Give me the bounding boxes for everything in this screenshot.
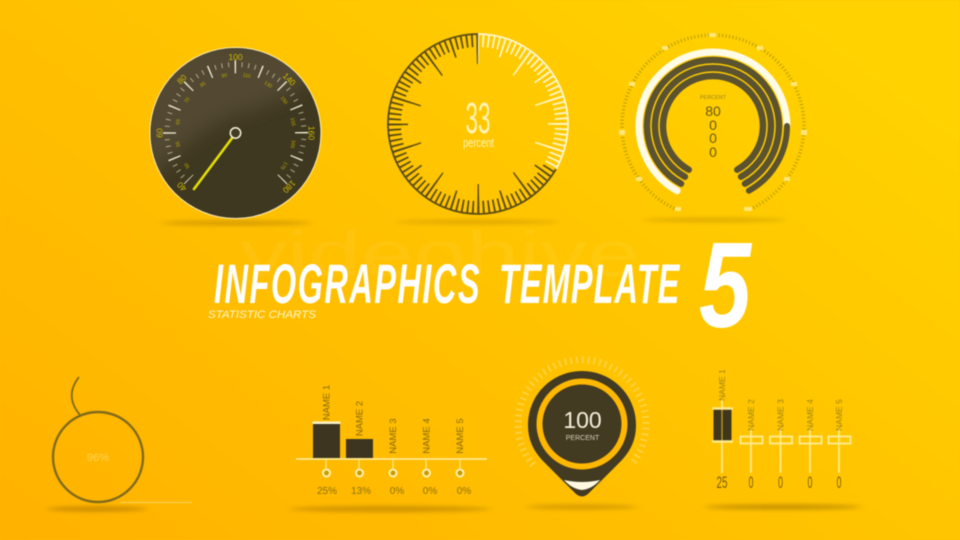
bar values <box>317 486 471 497</box>
panel: percent dial <box>388 34 568 224</box>
pin notch <box>564 480 600 490</box>
outer scale labels: 100 <box>228 52 243 62</box>
inner scale labels: 50 <box>183 161 191 169</box>
dial elapsed ticks <box>477 32 570 170</box>
outer scale labels: 160 <box>306 126 316 140</box>
inner scale labels: 70 <box>183 96 192 105</box>
inner scale labels: 130 <box>263 80 273 90</box>
slider names: NAME 3 <box>776 399 786 431</box>
dotted scale ring <box>622 35 804 210</box>
scale markers <box>619 33 807 211</box>
readout: 0 <box>709 144 717 160</box>
inner scale labels: 85 <box>199 81 207 89</box>
slider one fill <box>714 409 732 441</box>
inner scale labels: 155 <box>289 117 296 127</box>
inner scale labels: 175 <box>279 160 288 171</box>
panel: speedometer gauge <box>140 40 322 226</box>
baseline stroke <box>120 502 192 504</box>
inner scale labels: 65 <box>175 118 182 125</box>
slider values: 0 <box>778 473 783 492</box>
slider names: NAME 2 <box>746 399 756 431</box>
inner scale labels: 55 <box>175 141 182 147</box>
needle <box>194 138 232 189</box>
bar names <box>322 385 466 454</box>
slider values <box>716 473 842 492</box>
panel: location pin gauge <box>518 360 646 510</box>
subtitle: STATISTIC CHARTS <box>208 309 317 321</box>
shadow: arc gauge <box>643 218 787 222</box>
readout: 0 <box>709 130 717 146</box>
circle tail <box>72 377 80 415</box>
panel: concentric arc gauge <box>619 33 807 222</box>
bar one <box>313 424 340 458</box>
shadow: bars <box>290 506 490 512</box>
inner scale labels: 165 <box>289 139 296 149</box>
slider one stem highlight <box>721 409 723 441</box>
pin ring <box>540 382 624 466</box>
bar values: 13% <box>351 486 371 497</box>
title numeral: 5 <box>699 217 753 353</box>
ring three <box>655 68 771 177</box>
remainder arc dark <box>749 126 787 191</box>
pin unit: PERCENT <box>566 435 600 442</box>
stems <box>326 459 460 470</box>
shadow: dial <box>396 220 560 224</box>
outer scale labels <box>154 52 316 195</box>
axis line <box>296 458 487 460</box>
dial unit: percent <box>463 135 494 150</box>
pin body <box>528 371 636 496</box>
shadow: sliders <box>705 504 861 510</box>
gauge rim <box>150 47 322 219</box>
minor ticks <box>167 64 304 181</box>
pin rays <box>518 360 646 465</box>
panel: loading circle <box>47 377 192 512</box>
outer scale labels: 80 <box>175 72 189 86</box>
panel: bar chart <box>290 385 490 512</box>
readout: 0 <box>709 117 717 133</box>
title: TEMPLATE <box>499 253 680 315</box>
shadow: pin <box>527 504 637 510</box>
gauge face <box>150 48 320 218</box>
shadow: speedometer <box>161 220 311 226</box>
watermark: videohive <box>240 218 640 290</box>
slider values: 25 <box>716 473 728 492</box>
bar values: 25% <box>317 486 337 497</box>
title: INFOGRAPHICS <box>214 253 481 315</box>
slider names <box>717 369 844 431</box>
bar two <box>346 439 373 458</box>
inner scale labels <box>175 72 296 171</box>
outer scale labels: 140 <box>281 71 298 88</box>
readout <box>700 95 727 160</box>
bar values: 0% <box>390 486 404 497</box>
needle hub <box>230 128 241 138</box>
major ticks <box>170 67 302 180</box>
circle outline <box>53 412 143 502</box>
dial remaining ticks <box>388 34 568 214</box>
readout: PERCENT <box>700 95 727 101</box>
gauge gloss <box>150 48 304 169</box>
ring two <box>647 60 779 184</box>
bar values: 0% <box>423 486 437 497</box>
bar names: NAME 1 <box>322 385 332 420</box>
readout: 80 <box>705 103 721 119</box>
bar values: 0% <box>457 486 471 497</box>
slider values: 0 <box>836 473 842 492</box>
bar names: NAME 4 <box>422 418 432 454</box>
inner scale labels: 150 <box>279 95 289 106</box>
stem rings <box>323 470 464 476</box>
outer scale labels: 180 <box>280 178 298 195</box>
bar names: NAME 2 <box>354 401 366 436</box>
inner scale labels: 110 <box>242 72 251 80</box>
slider names: NAME 5 <box>834 399 844 431</box>
slider names: NAME 4 <box>805 399 815 431</box>
dial value: 33 <box>466 94 490 143</box>
slider handles <box>740 436 850 444</box>
ring four <box>663 76 763 170</box>
inner scale labels: 90 <box>221 73 228 80</box>
value arc white <box>639 52 787 191</box>
slider values: 0 <box>808 473 812 492</box>
panel: slider chart <box>705 369 861 510</box>
slider stems <box>722 400 839 473</box>
title <box>214 253 680 315</box>
shadow: circle <box>47 506 147 512</box>
bar one cap <box>312 422 340 424</box>
outer scale labels: 40 <box>175 180 189 194</box>
slider names: NAME 1 <box>717 369 727 401</box>
bar names: NAME 5 <box>455 418 466 454</box>
slider one caps <box>712 408 733 442</box>
pin value: 100 <box>563 407 602 433</box>
slider values: 0 <box>748 473 754 492</box>
circle value: 96% <box>87 452 109 464</box>
outer scale labels: 60 <box>154 128 164 138</box>
bar names: NAME 3 <box>388 418 399 454</box>
